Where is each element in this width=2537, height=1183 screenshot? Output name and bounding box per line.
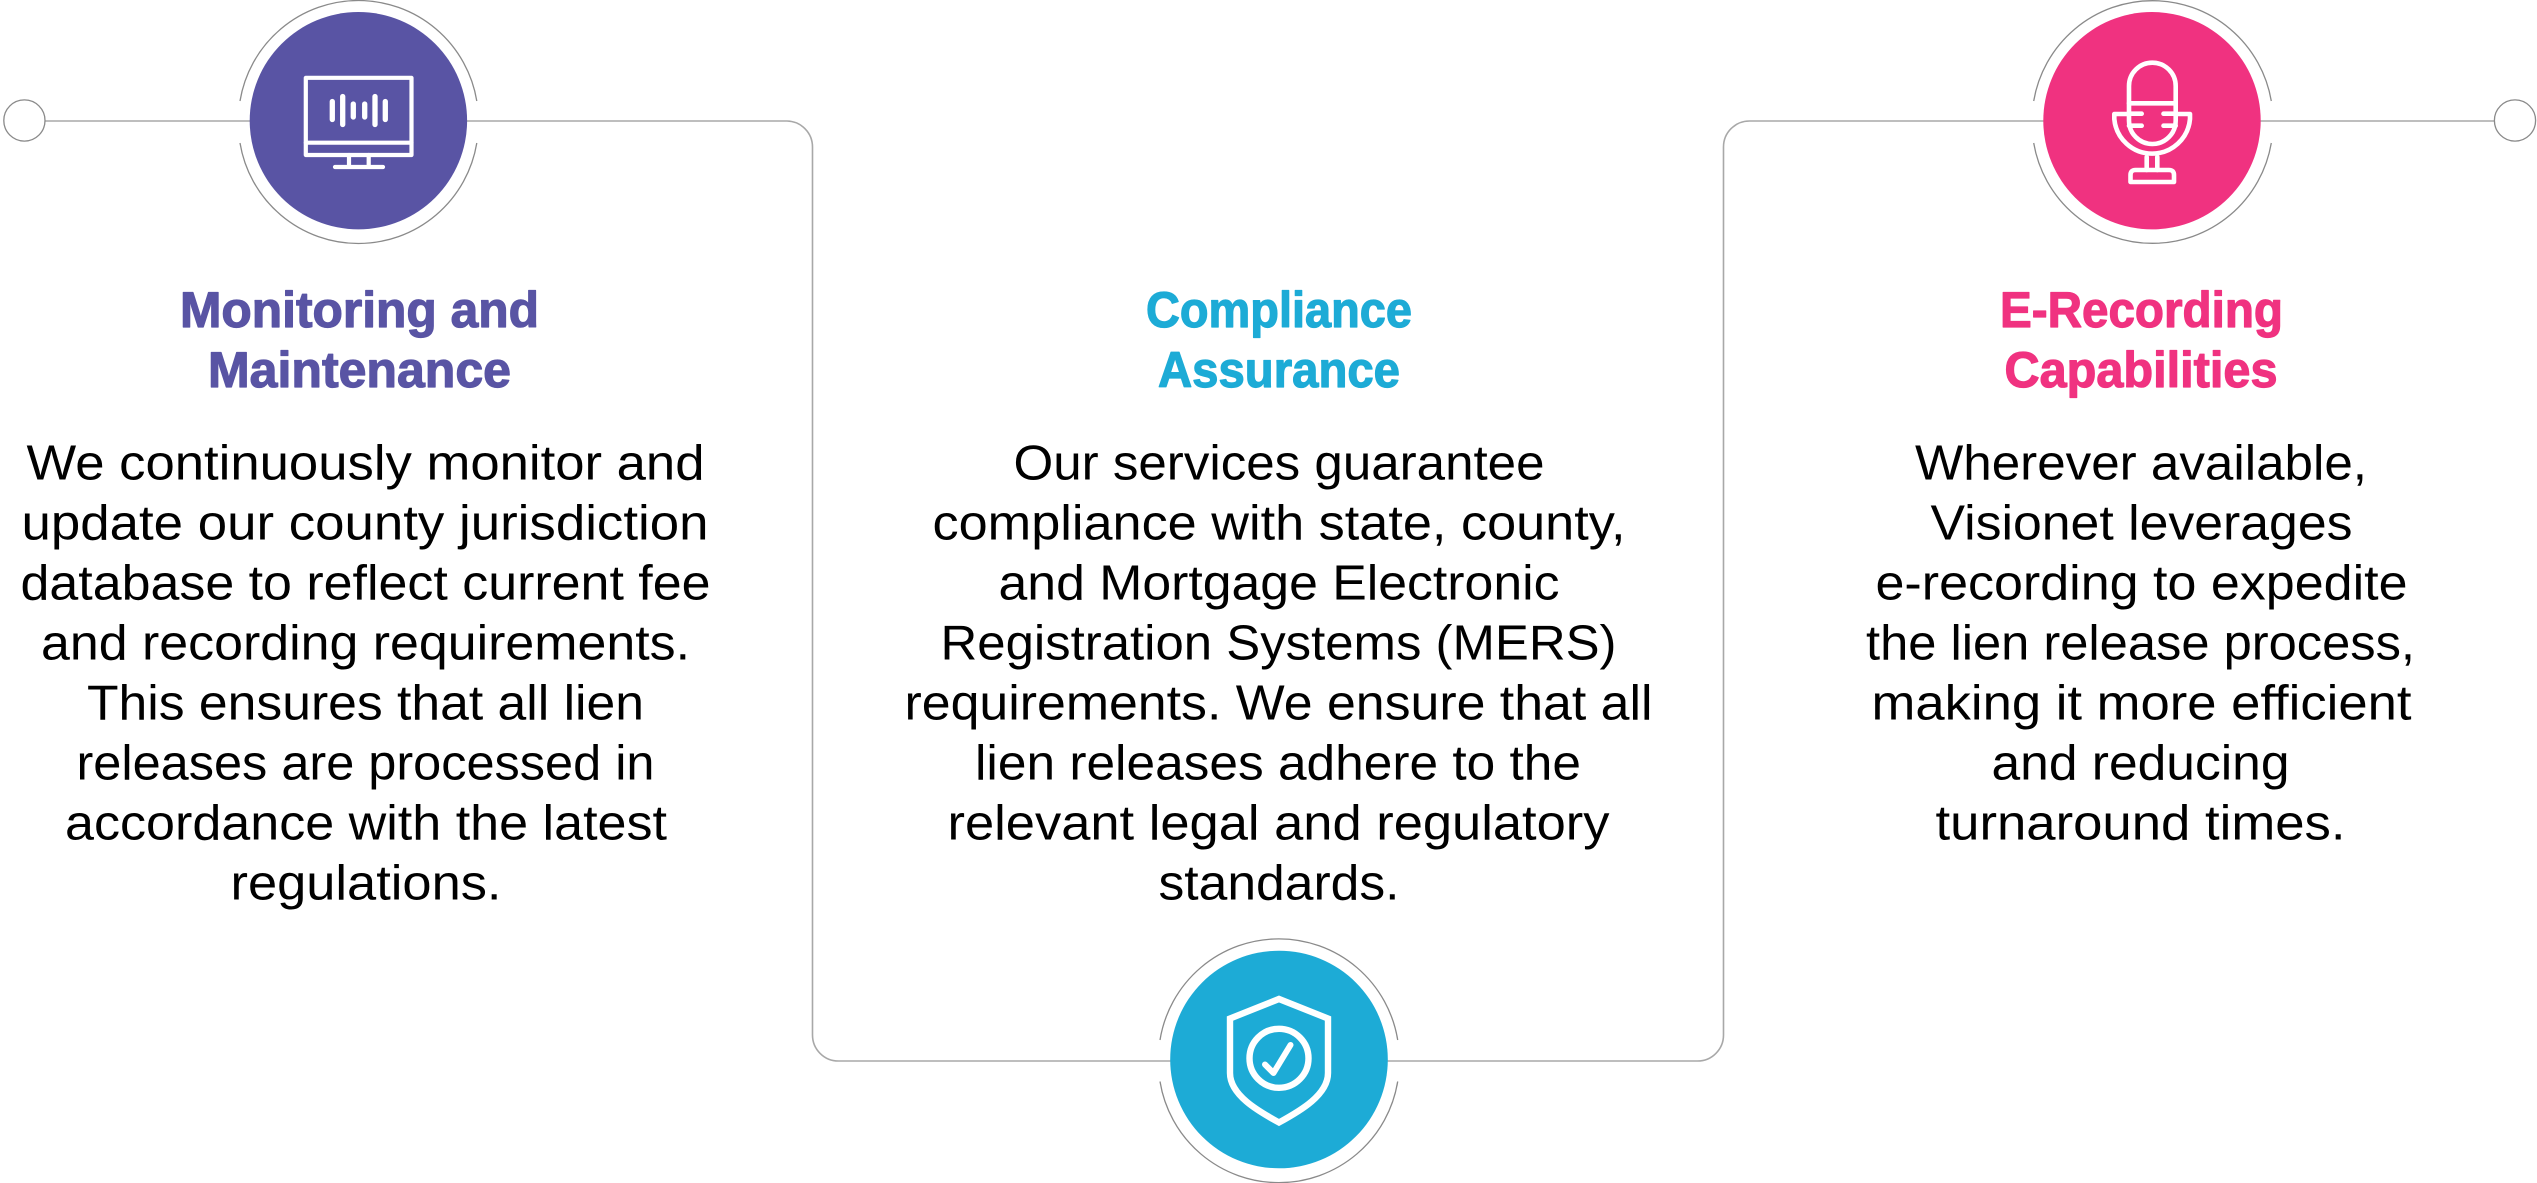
body text: compliance: and Mortgage Electronic	[998, 556, 1560, 610]
body text: e-recording: turnaround times.	[1936, 796, 2346, 850]
heading: e-recording capabilities: Capabilities	[2004, 342, 2278, 398]
body text: e-recording: and reducing	[1992, 736, 2290, 790]
icon: shield with check	[1230, 999, 1328, 1122]
heading: compliance assurance: Compliance	[1146, 282, 1412, 338]
body text: compliance	[904, 436, 1652, 910]
body text: e-recording	[1866, 436, 2415, 850]
body text: e-recording: e-recording to expedite	[1876, 556, 2408, 610]
ring: monitoring	[240, 1, 477, 243]
body text: monitoring: accordance with the latest	[65, 796, 667, 850]
ring: compliance	[1160, 939, 1398, 1183]
body text: compliance: standards.	[1158, 856, 1400, 910]
body text: compliance: requirements. We ensure that all	[904, 676, 1652, 730]
body text: compliance: lien releases adhere to the	[975, 736, 1581, 790]
panel: monitoring and maintenance	[20, 1, 710, 910]
body text: e-recording: the lien release process,	[1866, 616, 2415, 670]
body text: e-recording: Wherever available,	[1915, 436, 2367, 490]
heading: e-recording capabilities	[2000, 282, 2283, 398]
body text: e-recording: making it more efficient	[1872, 676, 2412, 730]
body text: compliance: relevant legal and regulatory	[948, 796, 1610, 850]
body text: monitoring: update our county jurisdiction	[22, 496, 708, 550]
heading: compliance assurance	[1146, 282, 1412, 398]
badge: monitoring	[250, 12, 467, 229]
body text: monitoring: database to reflect current fee	[20, 556, 710, 610]
left end node	[4, 100, 45, 141]
body text: monitoring: regulations.	[230, 856, 502, 910]
right end node	[2494, 100, 2536, 141]
body text: monitoring: releases are processed in	[76, 736, 654, 790]
heading: e-recording capabilities: E-Recording	[2000, 282, 2283, 338]
body text: monitoring: and recording requirements.	[41, 616, 690, 670]
heading: monitoring and maintenance: Maintenance	[208, 342, 511, 398]
body text: monitoring	[20, 436, 710, 910]
icon: microphone	[2114, 63, 2190, 182]
body text: compliance: compliance with state, county,	[932, 496, 1626, 550]
body text: compliance: Our services guarantee	[1014, 436, 1544, 490]
heading: compliance assurance: Assurance	[1158, 342, 1400, 398]
panel: e-recording capabilities	[1866, 1, 2415, 850]
connector line	[45, 121, 2494, 1061]
panel: compliance assurance	[904, 282, 1652, 1183]
heading: monitoring and maintenance	[180, 282, 539, 398]
icon: monitor with waveform	[306, 78, 412, 167]
heading: monitoring and maintenance: Monitoring and	[180, 282, 539, 338]
ring: e-recording	[2034, 1, 2271, 243]
body text: monitoring: This ensures that all lien	[87, 676, 644, 730]
body text: e-recording: Visionet leverages	[1930, 496, 2352, 550]
body text: compliance: Registration Systems (MERS)	[940, 616, 1616, 670]
body text: monitoring: We continuously monitor and	[26, 436, 704, 490]
badge: e-recording	[2043, 12, 2261, 229]
badge: compliance	[1170, 951, 1388, 1168]
